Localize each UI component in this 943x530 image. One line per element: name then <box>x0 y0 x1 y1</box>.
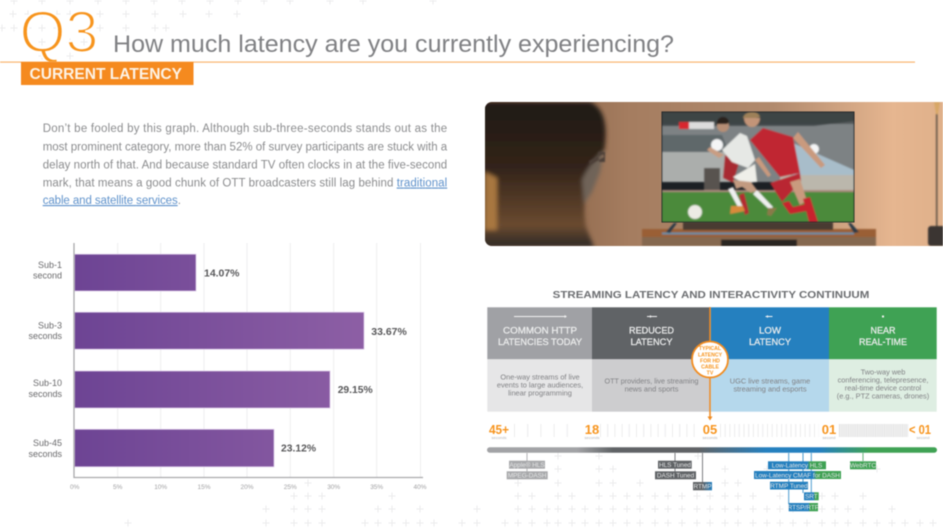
callout: typical latency for HD cable TV: TV <box>707 370 714 376</box>
x-axis labels: 35% <box>370 484 383 491</box>
timeline labels: seconds <box>703 435 717 440</box>
callout: typical latency for HD cable TV: CABLE <box>701 364 719 370</box>
text block: intro paragraph <box>43 123 448 207</box>
callout: typical latency for HD cable TV: LATENCY <box>698 352 723 358</box>
x-axis labels: 25% <box>284 484 297 491</box>
panel: continuum table <box>487 307 937 412</box>
x-axis labels: 40% <box>413 484 427 491</box>
protocol tag: WebRTC: WebRTC <box>850 463 876 470</box>
bar: sub-10 seconds: seconds <box>28 389 62 399</box>
bar: sub-45 seconds: Sub-45 <box>33 438 62 448</box>
bar chart: current latency <box>28 243 427 491</box>
protocol tags: reduced latency: DASH Tuned <box>657 473 695 480</box>
text block: intro paragraph: mark, that means a good chunk of OTT broadcasters still lag behind <box>43 178 393 190</box>
protocol tags: reduced latency: RTMP <box>694 484 712 490</box>
protocol tags: common HTTP: Apple® HLS <box>509 461 545 469</box>
x-axis labels <box>70 484 427 491</box>
protocol tags: low latency: RTMP Tuned <box>770 483 808 490</box>
bar: sub-1 second <box>33 254 240 291</box>
arrow: typical cable latency marker <box>708 307 712 420</box>
text block: intro paragraph: Don’t be fooled by this graph. Although sub-three-seconds stands out as the <box>43 123 447 135</box>
timeline labels: 18 <box>585 422 599 437</box>
section label: current latency <box>21 62 194 85</box>
bar: sub-10 seconds <box>28 371 373 408</box>
bar: sub-45 seconds <box>28 429 317 467</box>
x-axis labels: 20% <box>240 484 254 491</box>
person silhouette <box>480 102 606 247</box>
column: low latency: LATENCY <box>749 337 792 348</box>
text block: intro paragraph: most prominent category, more than 52% of survey participants are stuck with a <box>43 142 448 154</box>
timeline labels: 45+ <box>489 422 509 437</box>
column: near real-time: (e.g., PTZ cameras, drones) <box>837 392 929 400</box>
text block: intro paragraph: . <box>178 195 181 207</box>
column: low latency: LOW <box>759 326 781 336</box>
latency gradient bar <box>487 447 937 453</box>
heading: streaming latency continuum: STREAMING LATENCY AND INTERACTIVITY CONTINUUM <box>553 289 870 301</box>
bar: sub-3 seconds: Sub-3 <box>38 320 62 330</box>
bar: sub-3 seconds: seconds <box>28 331 62 341</box>
red player behind <box>723 155 739 183</box>
column: near real-time: NEAR <box>870 326 896 336</box>
timeline labels: seconds <box>585 435 599 440</box>
column: common HTTP latencies: events to large audiences, <box>497 380 583 389</box>
title: question: How much latency are you currently experiencing? <box>113 31 674 58</box>
column: low latency: UGC live streams, game <box>730 376 810 386</box>
column: common HTTP latencies: LATENCIES TODAY <box>498 337 583 348</box>
column: near real-time: conferencing, telepresence, <box>838 376 928 384</box>
bar: sub-45 seconds: 23.12% <box>281 442 317 454</box>
bar: sub-10 seconds: 29.15% <box>338 384 373 396</box>
protocol tags: low latency: SRT <box>805 494 818 501</box>
column: common HTTP latencies <box>487 307 592 412</box>
column: near real-time: real-time device control <box>845 384 922 392</box>
section label: current latency: CURRENT LATENCY <box>30 66 182 83</box>
timeline labels: seconds <box>492 435 506 440</box>
TV screen <box>662 112 854 222</box>
protocol tags: common HTTP <box>507 461 548 480</box>
column: reduced latency: news and sports <box>625 384 679 394</box>
column: common HTTP latencies: COMMON HTTP <box>503 326 577 336</box>
column: near real-time: REAL-TIME <box>859 337 907 348</box>
timeline labels: 01 <box>822 422 836 437</box>
protocol tags: reduced latency: HLS Tuned <box>659 462 691 469</box>
red player front <box>793 132 825 168</box>
protocol stems <box>527 453 863 504</box>
timeline labels: 05 <box>703 422 717 437</box>
bar: sub-45 seconds: seconds <box>28 449 62 459</box>
timeline labels: second <box>823 435 835 440</box>
lamp and chair <box>928 102 943 246</box>
text block: intro paragraph: cable and satellite services <box>43 195 178 207</box>
bar: sub-1 second: Sub-1 <box>38 260 62 270</box>
bar: sub-1 second: 14.07% <box>204 268 240 280</box>
protocol tags: low latency: Low-Latency HLS <box>772 463 822 470</box>
bar: sub-1 second: second <box>33 271 62 281</box>
x-axis labels: 10% <box>154 484 167 491</box>
protocol tags: low latency <box>754 461 841 512</box>
TV stand <box>642 222 876 246</box>
photo: viewer watching football on TV <box>480 102 943 247</box>
timeline labels: second <box>917 435 929 440</box>
column: reduced latency: OTT providers, live streaming <box>604 376 698 386</box>
protocol tags: low latency: RTSP/RTP <box>788 504 819 512</box>
x-axis labels: 30% <box>327 484 340 491</box>
protocol tags: low latency: Low-Latency CMAF for DASH <box>755 472 840 479</box>
protocol tags: common HTTP: MPEG-DASH <box>508 473 547 480</box>
callout: typical latency for HD cable TV: TYPICAL <box>699 346 722 352</box>
orange rule <box>0 62 915 63</box>
text block: intro paragraph: traditional <box>397 178 447 190</box>
x-axis labels: 15% <box>197 484 211 491</box>
callout: typical latency for HD cable TV: FOR HD <box>700 358 720 364</box>
column: reduced latency: LATENCY <box>630 337 673 348</box>
bar: sub-3 seconds: 33.67% <box>371 326 407 338</box>
heading: Q3: Q3 <box>20 0 98 65</box>
timeline labels: < 01 <box>909 422 931 437</box>
protocol tags: reduced latency <box>655 461 712 490</box>
column: reduced latency <box>592 307 711 412</box>
x-axis labels: 5% <box>113 484 123 491</box>
column: common HTTP latencies: One-way streams of live <box>500 372 580 381</box>
glasses <box>589 152 605 165</box>
column: near real-time <box>829 307 937 412</box>
text block: intro paragraph: delay north of that. And because standard TV often clocks in at the five-second <box>43 160 447 172</box>
timeline tick marks <box>514 424 908 437</box>
column: common HTTP latencies: linear programming <box>508 388 572 397</box>
column: reduced latency: REDUCED <box>629 326 674 336</box>
timeline labels <box>489 422 931 440</box>
bar: sub-10 seconds: Sub-10 <box>33 378 62 388</box>
column: low latency: streaming and esports <box>733 384 807 394</box>
x-axis labels: 0% <box>70 484 80 491</box>
bar: sub-3 seconds <box>28 312 407 349</box>
white player <box>707 147 724 158</box>
column: near real-time: Two-way web <box>861 368 905 376</box>
callout: typical latency for HD cable TV <box>692 342 728 378</box>
column: low latency <box>711 307 829 412</box>
